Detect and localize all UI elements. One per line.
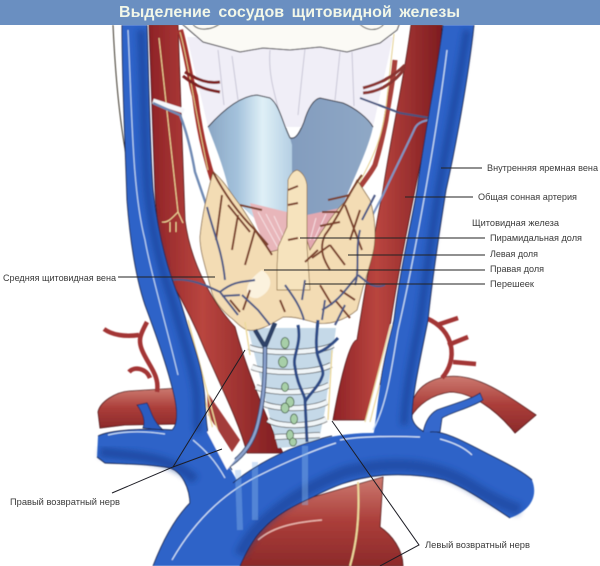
trachea (248, 328, 336, 448)
vein stub above left arm (423, 393, 483, 433)
label: right lobe: Правая доля (490, 264, 544, 275)
inferior thyroid veins (294, 320, 338, 442)
label: right recurrent nerve: Правый возвратный нерв (10, 497, 120, 508)
aorta (240, 477, 403, 566)
hyoid bone and membrane (180, 22, 400, 127)
left jugular and brachiocephalic vein (97, 25, 238, 505)
label: pyramidal lobe: Пирамидальная доля (490, 233, 582, 244)
illustration: thyroid anatomy (97, 22, 536, 566)
recurrent nerves (184, 320, 332, 440)
label: left lobe: Левая доля (490, 249, 538, 260)
label: right recurrent nerve (10, 350, 245, 508)
white gap between vein and carotid (207, 425, 235, 470)
brachiocephalic vein arch (153, 432, 534, 566)
label: left recurrent nerve: Левый возвратный нерв (425, 540, 530, 551)
right common carotid artery (333, 25, 442, 422)
thyroid cartilage (208, 95, 373, 225)
label: isthmus: Перешеек (490, 279, 535, 290)
label: thyroid gland: Щитовидная железа (472, 218, 560, 229)
inferior thyroid vein, lower trunk (228, 323, 275, 466)
left common carotid artery (149, 25, 283, 453)
left subclavian artery branch behind vein (408, 318, 536, 433)
superior thyroid vein, left (153, 103, 207, 207)
label: middle thyroid vein: Средняя щитовидная вена (3, 273, 117, 284)
thyroid ima lymph nodes (278, 338, 298, 446)
title banner (0, 0, 600, 25)
right jugular vein (372, 25, 474, 444)
thyroid gland (200, 170, 375, 330)
label: left recurrent nerve (332, 421, 530, 566)
title banner: Выделение сосудов щитовидной железы (119, 4, 460, 21)
thyroid veins (172, 195, 385, 325)
label: internal jugular vein: Внутренняя яремная вена (487, 163, 599, 174)
right subclavian artery branch behind vein (98, 322, 180, 428)
label: common carotid artery: Общая сонная артерия (478, 192, 577, 203)
white nerve beside left jugular (113, 25, 138, 210)
thyroid arteries (213, 172, 362, 318)
cricothyroid muscles (250, 203, 340, 252)
